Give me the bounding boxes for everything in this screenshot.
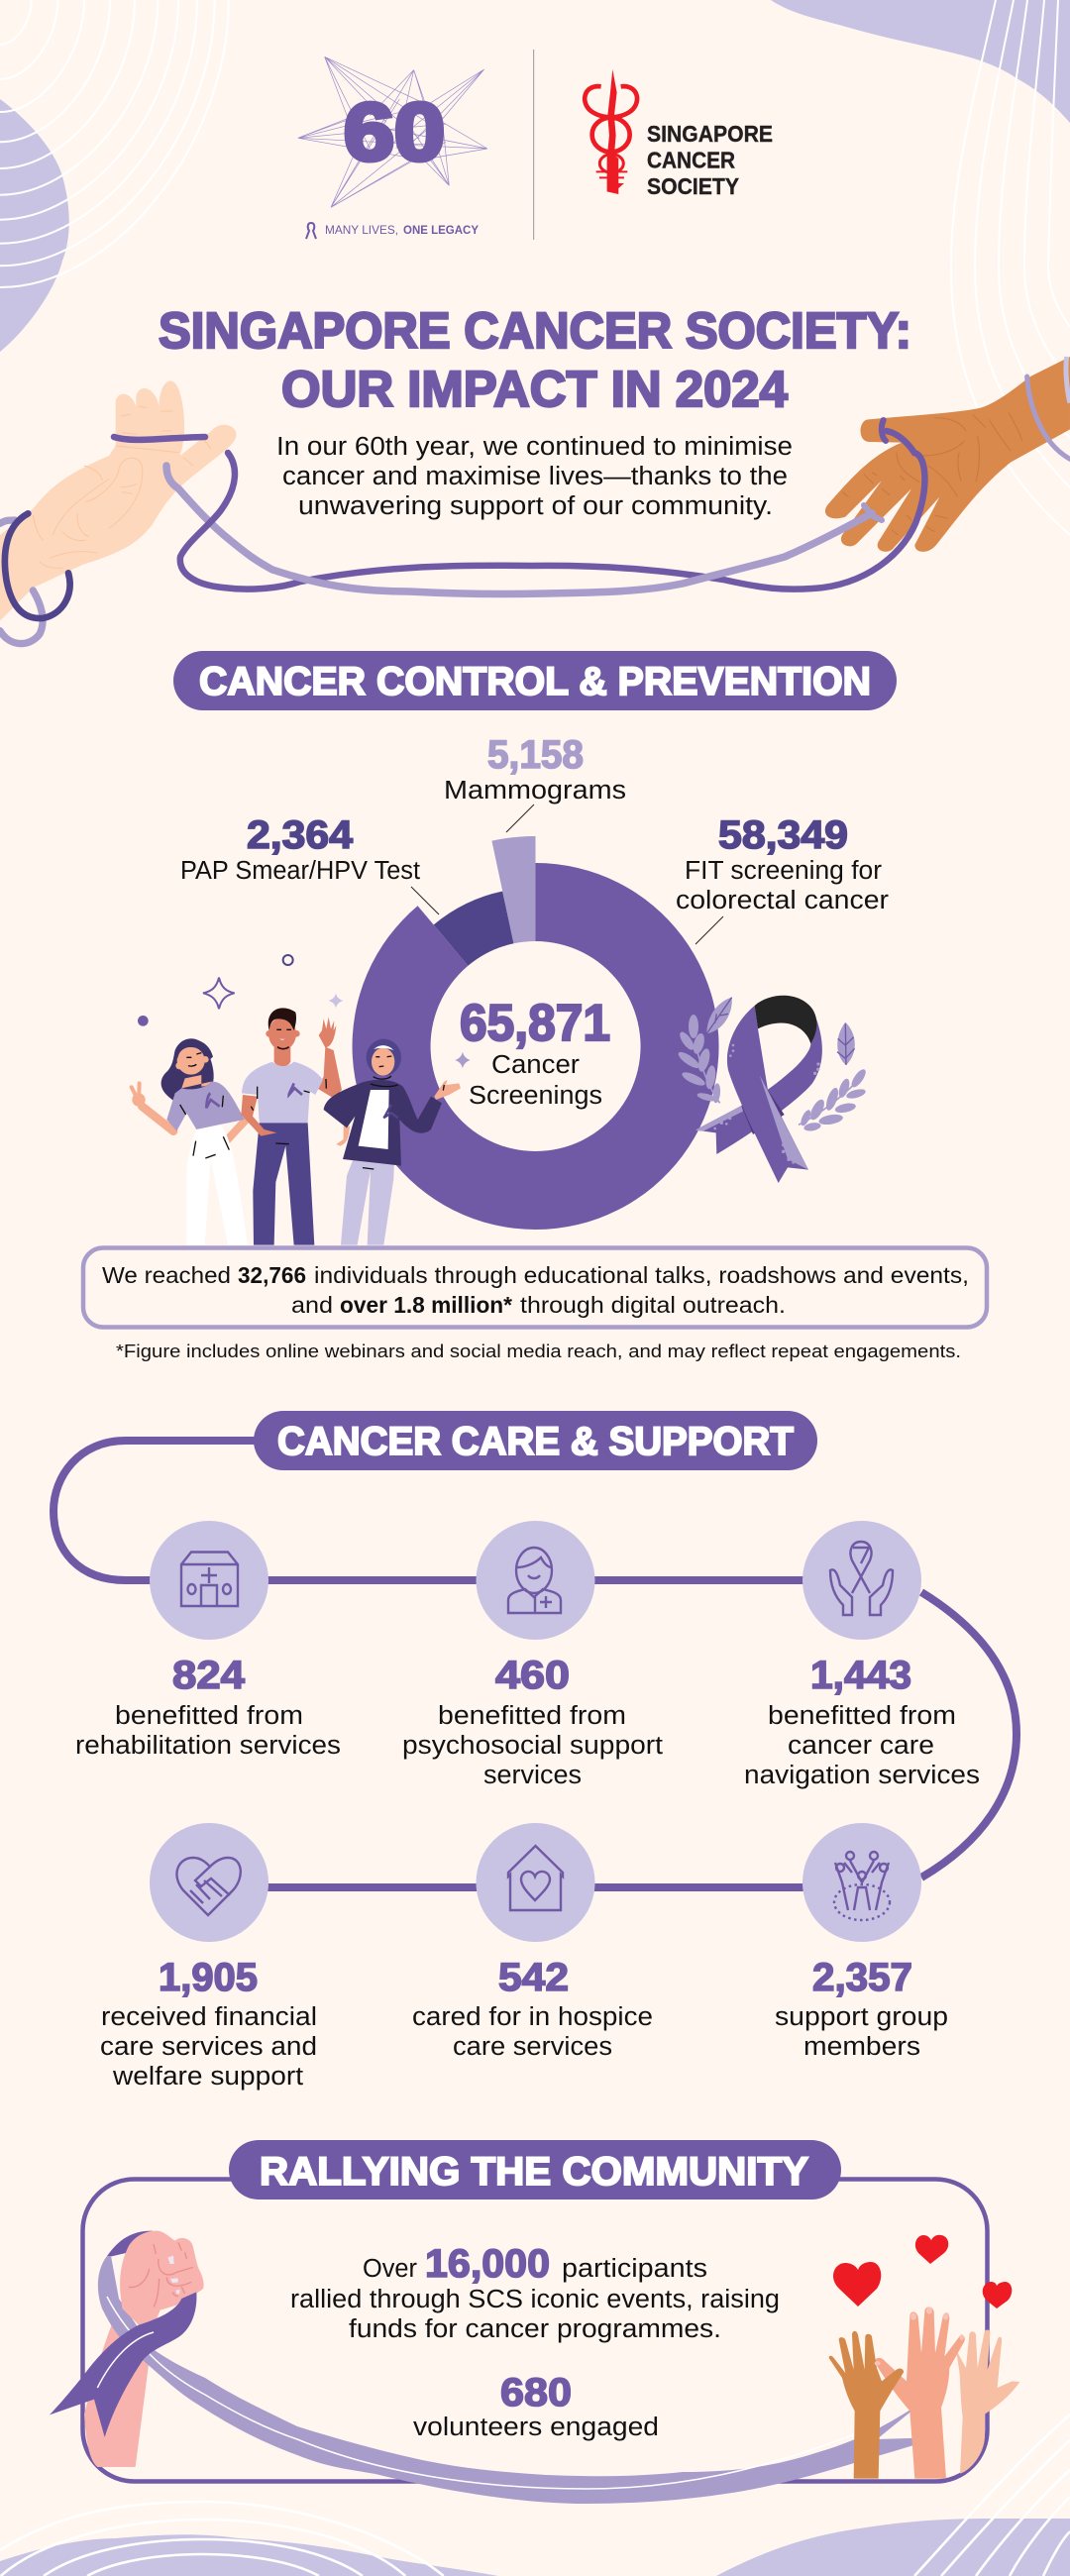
stat: psychosocial support: benefitted from	[438, 1702, 626, 1730]
illustration: right hand with thread	[825, 357, 1070, 552]
stat: hospice care: cared for in hospice	[412, 2003, 653, 2031]
stat: support group: support group	[775, 2003, 948, 2031]
callout: outreach reach: We reached	[102, 1262, 231, 1288]
leaves left	[676, 998, 732, 1104]
segment: FIT screening	[353, 863, 719, 1230]
callout: outreach reach: over 1.8 million*	[340, 1292, 512, 1318]
ribbon	[696, 1019, 822, 1154]
stat: financial care: received financial	[101, 2003, 317, 2031]
logo: Singapore Cancer Society	[585, 69, 773, 199]
panel: rallying the community	[83, 2180, 987, 2481]
centre total: 65,871	[460, 995, 610, 1052]
stat: cancer care navigation: cancer care	[788, 1732, 934, 1760]
illustration: purple awareness ribbon with leaves	[676, 996, 868, 1183]
person: woman with white trousers	[132, 1038, 248, 1245]
stat: support group: members	[803, 2033, 920, 2061]
icon: ribbon in hands	[830, 1542, 893, 1615]
stat: financial care: welfare support	[112, 2063, 303, 2091]
title: SINGAPORE CANCER SOCIETY:	[159, 302, 911, 359]
centre total: Cancer	[491, 1051, 581, 1079]
callout: outreach reach: individuals through educational talks, roadshows and events,	[314, 1262, 969, 1288]
centre total: Screenings	[469, 1082, 602, 1110]
label: mammograms: Mammograms	[444, 777, 626, 805]
text: participants: participants	[562, 2255, 707, 2283]
icon: hospital	[181, 1552, 238, 1606]
icon: heart handshake	[176, 1858, 241, 1915]
stat: hospice care: care services	[453, 2033, 612, 2061]
callout: outreach reach: 32,766	[238, 1262, 306, 1288]
text: participants	[290, 2242, 780, 2343]
tagline: many lives, one legacy	[306, 223, 479, 239]
text: participants: rallied through SCS iconic events, raising	[290, 2286, 780, 2313]
stat: support group	[775, 1823, 948, 2061]
person: woman in hijab	[324, 1039, 461, 1245]
tagline: many lives, one legacy: ONE LEGACY	[403, 225, 479, 237]
arm	[84, 2231, 175, 2467]
logo: Singapore Cancer Society: SOCIETY	[647, 173, 739, 199]
stat: psychosocial support	[402, 1521, 663, 1789]
heading: cancer care and support: CANCER CARE & SUPPORT	[277, 1420, 794, 1463]
text: volunteers	[413, 2371, 659, 2441]
stat: rehabilitation: benefitted from	[115, 1702, 303, 1730]
label: PAP smear: PAP Smear/HPV Test	[180, 857, 420, 885]
thread: purple and lilac cross strands	[180, 431, 924, 594]
label: FIT screening: FIT screening for	[685, 857, 883, 885]
text: volunteers: 680	[500, 2371, 572, 2415]
icon: group of people	[834, 1852, 890, 1920]
stat: cancer care navigation: benefitted from	[768, 1702, 956, 1730]
text: participants: 16,000	[425, 2242, 550, 2286]
callout: outreach reach: through digital outreach.	[520, 1292, 786, 1318]
centre total	[460, 995, 610, 1110]
connector lines: care and support path	[54, 1441, 1016, 1887]
callout: outreach reach	[83, 1248, 987, 1328]
logo: Singapore Cancer Society: SINGAPORE	[647, 121, 773, 147]
illustration: raised hands	[829, 2307, 1019, 2479]
stat: cancer care navigation: 1,443	[810, 1654, 911, 1697]
lilac ribbon	[98, 2256, 941, 2504]
heading: cancer care and support	[254, 1411, 817, 1470]
fist and dark ribbon tail	[50, 2231, 204, 2437]
text: volunteers: volunteers engaged	[413, 2414, 659, 2441]
label: mammograms	[444, 733, 626, 832]
label: FIT screening: colorectal cancer	[676, 887, 890, 914]
intro text: In our 60th year, we continued to minimise	[276, 433, 793, 461]
logo: 60th anniversary star	[298, 56, 487, 207]
label: FIT screening: 58,349	[718, 813, 848, 857]
text: participants: funds for cancer programmes.	[349, 2315, 721, 2343]
illustration: three people	[132, 955, 471, 1245]
footnote: *Figure includes online webinars and social media reach, and may reflect repeat engagements.	[116, 1342, 961, 1361]
heading: rallying the community	[229, 2140, 841, 2200]
stat: financial care: care services and	[100, 2033, 317, 2061]
stat: hospice care: 542	[498, 1956, 569, 1999]
logo: 60th anniversary star: 60	[344, 87, 445, 177]
heading: rallying the community: RALLYING THE COMMUNITY	[260, 2150, 808, 2194]
stat: rehabilitation	[75, 1521, 341, 1760]
donut chart: 65,871 cancer screenings	[353, 836, 719, 1230]
label: PAP smear: 2,364	[247, 813, 354, 857]
icon: red hearts	[833, 2235, 1012, 2308]
stat: psychosocial support: 460	[495, 1654, 570, 1697]
sparkles	[138, 955, 471, 1068]
stat: support group: 2,357	[812, 1956, 912, 1999]
intro text: cancer and maximise lives—thanks to the	[282, 463, 788, 490]
text: participants: Over	[363, 2255, 417, 2283]
heading: cancer control and prevention: CANCER CONTROL & PREVENTION	[199, 660, 871, 703]
person: man with raised hand	[241, 1008, 342, 1245]
stat: financial care: 1,905	[159, 1956, 258, 1999]
icon: nurse	[508, 1548, 561, 1613]
heading: cancer control and prevention	[173, 651, 897, 710]
illustration: raised fist holding ribbon	[50, 2231, 941, 2504]
stat: cancer care navigation	[744, 1521, 980, 1789]
stat: cancer care navigation: navigation services	[744, 1762, 980, 1789]
stat: rehabilitation: 824	[172, 1654, 246, 1697]
segment: mammograms	[491, 836, 535, 943]
illustration: left hand with thread	[0, 380, 272, 644]
label: mammograms: 5,158	[487, 733, 584, 777]
stat: psychosocial support: services	[483, 1762, 582, 1789]
intro text	[276, 433, 793, 520]
tagline: many lives, one legacy: MANY LIVES,	[325, 225, 398, 237]
stat: hospice care	[412, 1823, 653, 2061]
icon: house with heart	[508, 1846, 563, 1910]
label: PAP smear	[180, 813, 439, 914]
stat: financial care	[100, 1823, 317, 2091]
title	[159, 302, 911, 417]
stat: rehabilitation: rehabilitation services	[75, 1732, 341, 1760]
segment: PAP smear	[434, 892, 513, 966]
stat: psychosocial support: psychosocial support	[402, 1732, 663, 1760]
leaves right	[837, 1022, 855, 1065]
title: OUR IMPACT IN 2024	[281, 361, 789, 417]
intro text: unwavering support of our community.	[298, 492, 773, 520]
logo: Singapore Cancer Society: CANCER	[647, 147, 735, 172]
callout: outreach reach: and	[291, 1292, 333, 1318]
label: FIT screening	[676, 813, 890, 944]
